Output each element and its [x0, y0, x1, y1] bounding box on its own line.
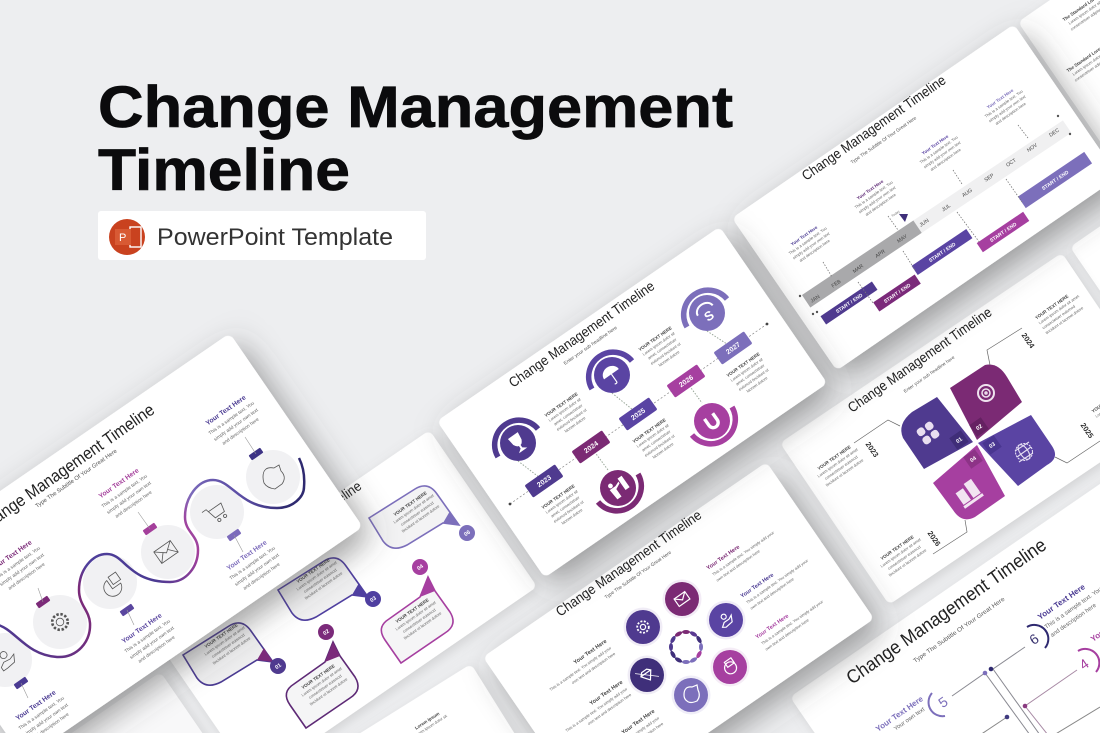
text blocks right: Your Text Here	[706, 544, 741, 572]
text blocks: YOUR TEXT HERE	[541, 483, 576, 510]
text block 6: and description here	[1050, 602, 1098, 639]
text blocks: simply add your own text	[923, 139, 962, 169]
text blocks: Your Text Here	[856, 178, 885, 201]
petal 02	[950, 364, 1022, 440]
bubble 01: tincidunt ut laoreet dolore	[212, 635, 252, 665]
slide title: Change Management Timeline	[843, 535, 1051, 689]
dotted connectors	[518, 331, 733, 481]
month bar: DEC	[1048, 127, 1061, 139]
text blocks right: own text and description here	[749, 576, 795, 611]
text block 5: Your Text Here	[874, 694, 925, 733]
text blocks: and description here	[994, 101, 1027, 126]
bubble 06: tincidunt ut laoreet dolore	[401, 503, 441, 533]
text block 6: Your Text Here	[1036, 582, 1087, 622]
start/end bar 3: START / END	[928, 241, 957, 264]
milestone: dollar umbrella	[684, 290, 727, 331]
text blocks left: This is a sample text. You simply add your	[548, 645, 613, 692]
year tag 2026	[667, 364, 705, 398]
icon: piggy bank	[263, 465, 284, 489]
text blocks: amet, consectetuer	[553, 402, 584, 426]
text blocks: Lorem ipsum dolor sit	[544, 488, 579, 515]
bubble 06: YOUR TEXT HERE	[393, 490, 428, 517]
text blocks: and description here	[137, 635, 177, 665]
milestone: trophy	[495, 420, 538, 461]
text blocks left: This is a sample text. You simply add your	[564, 686, 629, 733]
text blocks	[541, 325, 775, 530]
bubble 06	[369, 486, 475, 548]
text blocks: simply add your own text	[988, 93, 1027, 123]
circle: diamond	[628, 656, 666, 694]
text blocks	[0, 392, 286, 733]
slide title: Change Management Timeline	[553, 506, 704, 619]
start/end bar 5: START / END	[1041, 169, 1070, 192]
text blocks: laoreet dolore	[651, 441, 675, 459]
month bar: NOV	[1026, 142, 1039, 154]
timeline dashed axis	[509, 323, 768, 505]
text blocks: Your Text Here	[205, 394, 248, 427]
milestone: presenter	[598, 470, 641, 511]
text blocks: Lorem ipsum dolor sit	[641, 330, 676, 357]
month bar: FEB	[831, 279, 843, 289]
text blocks left: own text and description here	[570, 651, 617, 685]
text blocks: Your Text Here	[98, 467, 141, 500]
text blocks: laoreet dolore	[563, 415, 587, 433]
month bar: JUL	[941, 203, 952, 213]
panel: bottom centre slide	[170, 664, 572, 733]
bubble 02: tincidunt ut laoreet dolore	[309, 676, 349, 706]
start/end bar 2	[873, 274, 921, 312]
text blocks: laoreet dolore	[560, 507, 584, 525]
number squares: 02	[975, 424, 984, 432]
year tag 2025: 2025	[630, 407, 647, 422]
icon: gear	[52, 614, 68, 630]
wave line	[0, 458, 304, 657]
circle: envelope	[662, 580, 702, 618]
text blocks: This is a sample text. You	[854, 180, 894, 210]
slide title: Change Management Timeline	[845, 304, 995, 415]
text blocks: consectetuer euismod	[824, 454, 858, 481]
icon: globe	[1015, 442, 1033, 462]
slide subtitle: Type The Subtitle Of Your Great Here	[850, 115, 918, 166]
bubble 03	[278, 554, 381, 620]
petal 01	[901, 397, 973, 469]
year tag 2023: 2023	[536, 474, 553, 489]
text blocks: tincidunt ut laoreet dolore	[1044, 305, 1085, 335]
number squares: 04	[969, 455, 979, 464]
text blocks right: This is a sample text. You simply add your	[760, 599, 825, 646]
end dots	[799, 115, 1071, 315]
panel: gantt timeline slide	[732, 24, 1100, 370]
text blocks right: This is a sample text. You simply add your	[711, 530, 776, 577]
text blocks right: Your Text Here	[740, 572, 775, 600]
tag connectors	[21, 437, 256, 698]
bubble 06: consectetuer euismod	[400, 500, 434, 527]
text blocks left	[544, 638, 665, 733]
panel: numbered lines slide	[790, 459, 1100, 733]
text blocks: Lorem ipsum dolor sit amet	[816, 446, 859, 479]
year tag 2024: 2024	[583, 440, 600, 455]
text blocks: simply add your own text	[106, 480, 153, 516]
text blocks: Your Text Here	[790, 224, 819, 247]
bubble 01: YOUR TEXT HERE	[204, 622, 239, 649]
text blocks left: own text and description here	[586, 692, 633, 726]
marker 6: 6	[1026, 630, 1042, 648]
start/end bar 4	[977, 212, 1029, 252]
month bar: AUG	[961, 188, 974, 199]
text blocks: This is a sample text. You	[919, 135, 959, 165]
month bar: APR	[874, 249, 887, 260]
bubble 01: Lorem ipsum dolor sit amet	[203, 624, 246, 657]
text blocks: consectetuer euismod	[887, 544, 921, 571]
slide title: Change Management Timeline	[506, 277, 657, 390]
text blocks: euismod tincidunt ut	[649, 341, 682, 366]
milestone: magnet	[692, 403, 735, 444]
text blocks: Your Text Here	[121, 612, 164, 645]
start/end bar 1: START / END	[835, 292, 864, 315]
bubble 06: Lorem ipsum dolor sit amet	[392, 492, 435, 525]
start/end bar 1	[821, 282, 877, 324]
text blocks: and description here	[221, 417, 261, 447]
bubble 06: 06	[463, 530, 472, 538]
text blocks: amet, consectetuer	[647, 336, 678, 360]
marker 4: 4	[1076, 655, 1092, 673]
text blocks: simply add your own text	[213, 407, 260, 443]
bubble 03: consectetuer euismod	[303, 567, 337, 594]
start/end bar 3	[912, 229, 972, 275]
month bar: JAN	[810, 294, 821, 304]
marker 4	[1076, 649, 1099, 673]
marker 6	[1026, 625, 1048, 648]
marker 5: 5	[935, 693, 951, 711]
slide subtitle: Type The Subtitle Of Your Great Here	[604, 550, 673, 601]
text blocks: This is a sample text. You	[101, 473, 149, 510]
panel: far right top slide	[1018, 0, 1100, 179]
text blocks left: Your Text Here	[573, 639, 608, 666]
text blocks: simply add your own text	[0, 552, 46, 588]
slide subtitle: Type The Subtitle Of Your Great Here	[35, 449, 118, 510]
text blocks: amet, consectetuer	[735, 362, 766, 386]
bubble 02	[286, 624, 358, 728]
text blocks: This is a sample text. You	[124, 618, 172, 655]
panel: wave timeline slide	[0, 333, 363, 733]
slide subtitle: Enter your sub headline here	[563, 325, 619, 367]
icon: envelope	[154, 541, 178, 563]
text blocks: Lorem ipsum dolor sit amet	[879, 536, 922, 569]
heading: main title: Change Management	[98, 75, 733, 140]
slide subtitle: Enter your sub headline here	[903, 354, 956, 394]
text blocks right: Your Text Here	[755, 613, 790, 641]
text blocks: Your Text Here	[15, 689, 58, 722]
start/end bar 5	[1018, 152, 1092, 208]
text blocks: This is a sample text. You	[208, 400, 256, 437]
year labels	[864, 331, 1096, 548]
text blocks: This is a sample text. You	[788, 226, 828, 256]
number squares: 01	[955, 437, 964, 445]
year tag 2027	[714, 331, 752, 365]
text blocks: YOUR TEXT HERE	[880, 534, 915, 561]
month bar: MAR	[852, 263, 865, 275]
month bar: JUN	[919, 218, 931, 228]
text blocks: This is a sample text. You	[18, 695, 66, 732]
today marker: Today	[891, 209, 901, 218]
bubble 03: tincidunt ut laoreet dolore	[304, 570, 344, 600]
text blocks: laoreet dolore	[657, 349, 681, 367]
text blocks: consectetuer euismod	[1041, 304, 1076, 330]
icon: flower	[915, 420, 941, 446]
text blocks left: Your Text Here	[589, 680, 624, 707]
year tag 2023	[525, 464, 563, 498]
year labels: 2023	[864, 440, 881, 459]
connector lines	[854, 328, 1100, 554]
centre leaf ring	[669, 630, 703, 664]
text blocks: This is a sample text. You	[229, 545, 277, 582]
panel: year milestones slide	[437, 227, 827, 578]
badge: PowerPoint Template	[98, 211, 426, 260]
connector lines	[952, 647, 1100, 733]
text blocks: and description here	[798, 238, 831, 263]
icon: cart	[202, 501, 229, 527]
text blocks: YOUR TEXT HERE	[638, 325, 673, 352]
icon: chess	[953, 478, 984, 509]
bubble 04: YOUR TEXT HERE	[395, 597, 430, 624]
text blocks	[784, 84, 1031, 266]
icon: pie chart	[99, 572, 127, 600]
year tag 2027: 2027	[725, 341, 742, 356]
panel: speech bubbles slide	[146, 430, 537, 733]
month bar: SEP	[983, 172, 996, 184]
text blocks: Lorem ipsum dolor sit	[635, 422, 670, 449]
petal 03	[978, 415, 1055, 486]
bubble 04: Lorem ipsum dolor sit amet	[394, 599, 437, 632]
text blocks right: This is a sample text. You simply add your	[745, 558, 810, 605]
year tag 2026: 2026	[678, 374, 695, 389]
panel: bottom left slide	[0, 672, 268, 733]
text blocks: laoreet dolore	[745, 375, 769, 393]
text blocks: Lorem ipsum dolor sit	[729, 356, 764, 383]
text blocks: simply add your own text	[129, 625, 176, 661]
text blocks: Your Text Here	[226, 539, 269, 572]
icon: PowerPoint logo: P	[119, 232, 126, 244]
icon: PowerPoint logo	[109, 219, 145, 255]
year tag 2024	[572, 430, 610, 464]
year labels: 2024	[1020, 331, 1037, 351]
milestone: dollar umbrella: S	[701, 307, 717, 324]
panel: far right middle slide	[1070, 77, 1100, 404]
text blocks: Lorem ipsum dolor sit	[547, 396, 582, 423]
circle: pie	[710, 648, 750, 686]
bubble 04: 04	[416, 563, 426, 572]
text blocks: tincidunt ut laoreet dolore	[825, 457, 865, 487]
text blocks: and description here	[929, 147, 962, 172]
text blocks: euismod tincidunt ut	[737, 367, 770, 392]
panel: quadrant slide	[780, 253, 1100, 605]
text blocks: This is a sample text. You	[984, 89, 1024, 119]
text blocks: Lorem ipsum dolor sit amet	[1038, 293, 1081, 325]
text blocks: euismod tincidunt ut	[552, 499, 585, 524]
bubble 02: consectetuer euismod	[308, 673, 342, 700]
circle: gear	[624, 608, 662, 646]
petal 04	[933, 445, 1005, 519]
text blocks: tincidunt ut laoreet dolore	[888, 547, 928, 577]
text blocks: and description here	[7, 562, 47, 592]
bubble 03: Lorem ipsum dolor sit amet	[295, 559, 338, 592]
text blocks: simply add your own text	[234, 552, 281, 588]
text blocks: YOUR TEXT HERE	[544, 391, 579, 418]
start/end bar 2: START / END	[883, 282, 912, 305]
number squares: 03	[988, 442, 997, 450]
slide subtitle: Type The Subtitle Of Your Great Here	[913, 596, 1007, 665]
panel: six circles slide	[483, 462, 874, 733]
text blocks: simply add your own text	[858, 184, 897, 214]
circle: piggy	[672, 676, 710, 714]
bubble 04	[381, 559, 453, 663]
year labels: 2025	[1079, 421, 1096, 440]
badge label: PowerPoint Template	[157, 224, 393, 251]
bubble 01: consectetuer euismod	[211, 632, 245, 659]
text blocks: euismod tincidunt ut	[643, 433, 676, 458]
step circles	[0, 450, 300, 687]
heading: main title	[98, 75, 733, 203]
circle: hand	[706, 600, 746, 640]
milestone: umbrella	[589, 352, 632, 393]
text block 6	[1036, 575, 1100, 639]
text blocks: Your Text Here	[986, 87, 1015, 110]
text blocks: euismod tincidunt ut	[555, 407, 588, 432]
tags	[14, 448, 263, 689]
bubble 02: 02	[322, 629, 331, 637]
bubble 01: 01	[274, 663, 283, 671]
text blocks: YOUR TEXT HERE	[817, 444, 852, 471]
number squares	[949, 417, 1002, 469]
text blocks right	[706, 523, 829, 652]
text blocks: YOUR TEXT HERE	[726, 351, 761, 378]
heading: main title: Timeline	[98, 138, 350, 203]
year tag 2025	[619, 397, 657, 431]
slide title: Change Management Timeline	[213, 477, 364, 590]
text blocks: and description here	[864, 192, 897, 217]
bubble 02: Lorem ipsum dolor sit amet	[300, 665, 343, 698]
icon: hand with coin	[0, 647, 18, 671]
start/end bar 4: START / END	[989, 221, 1018, 244]
text block 5: Your own text	[893, 707, 926, 732]
text blocks right: own text and description here	[764, 617, 810, 652]
today marker	[891, 209, 908, 222]
bubble 02: YOUR TEXT HERE	[301, 663, 336, 690]
text blocks: YOUR TEXT HERE	[632, 417, 667, 444]
icon: target	[978, 385, 994, 401]
panel: bottom centre slide: Lorem Ipsum	[414, 711, 440, 731]
bubble 03: YOUR TEXT HERE	[296, 557, 331, 584]
text blocks: YOUR TEXT HERE	[1034, 294, 1069, 320]
bubble 01	[183, 619, 286, 685]
text blocks: and description here	[242, 562, 282, 592]
text blocks: amet, consectetuer	[641, 428, 672, 452]
month bar: OCT	[1005, 157, 1018, 169]
month bar	[802, 120, 1071, 307]
text blocks: Your Text Here	[921, 133, 950, 156]
text blocks: simply add your own text	[792, 230, 831, 260]
month bar: MAY	[896, 233, 909, 245]
bubble 03: 03	[369, 596, 378, 604]
text blocks: and description here	[114, 490, 154, 520]
bubble 04: consectetuer euismod	[402, 607, 436, 634]
dotted connectors	[823, 125, 1028, 303]
marker 5	[929, 693, 951, 716]
year labels: 2026	[926, 529, 943, 548]
text blocks	[813, 288, 1100, 578]
text blocks right: own text and description here	[715, 548, 761, 583]
text blocks: amet, consectetuer	[550, 494, 581, 518]
slide title: Change Management Timeline	[799, 72, 949, 183]
bubble 04: tincidunt ut laoreet dolore	[403, 610, 443, 640]
